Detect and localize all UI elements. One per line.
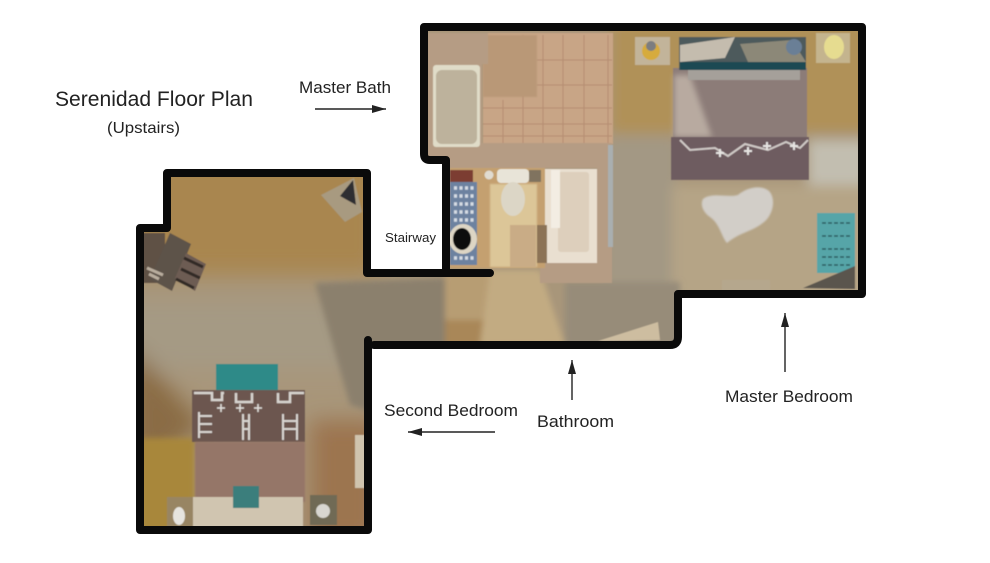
teal rug [817,213,855,273]
bathroom: tub [545,169,597,263]
nightstand: right lamp [816,33,850,63]
master bath: tile floor [483,33,613,144]
master bath: wall block [428,33,612,283]
corridor cabinet [598,322,660,341]
bathroom: red mat [450,170,473,182]
bathroom: toilet [484,169,541,216]
desk and chairs [143,233,206,291]
label: master bath: Master Bath [299,78,391,97]
floor plan infographic [56,23,866,534]
floor shading: corridor [315,270,680,412]
arrow: second bedroom [408,431,495,433]
arrow: bathroom [571,360,573,400]
master bed [671,37,809,180]
bathroom: floor [450,168,545,268]
floor shading: gold corner [144,436,196,526]
master bath: tub [433,65,480,147]
floor shading: master bedroom [608,31,858,290]
corner furniture: upper right [321,178,362,222]
floor shading: second bedroom [144,177,380,526]
bathroom: counter clutter [537,225,547,263]
floor: all rooms [144,31,858,526]
label: master bedroom: Master Bedroom [725,387,853,406]
closet door [355,435,366,488]
window bar [608,145,613,247]
sheepskin rug [702,187,773,243]
label: bathroom: Bathroom [537,412,614,431]
armchair corner [803,266,855,289]
second bed [192,364,305,527]
label: second bedroom: Second Bedroom [384,401,518,420]
subtitle: (Upstairs) [107,120,180,137]
master bath: bath rug [483,35,537,97]
title: Serenidad Floor Plan [55,88,253,111]
nightstand: right lamp second bedroom [310,495,337,525]
nightstand: left lamp [635,37,670,65]
nightstand: left lamp second bedroom [167,497,193,527]
label: stairway: Stairway [385,230,436,245]
walls [140,27,862,530]
bathroom: blue patterned rug [449,182,477,265]
arrow: master bath [315,108,386,110]
arrow: master bedroom [784,313,786,372]
